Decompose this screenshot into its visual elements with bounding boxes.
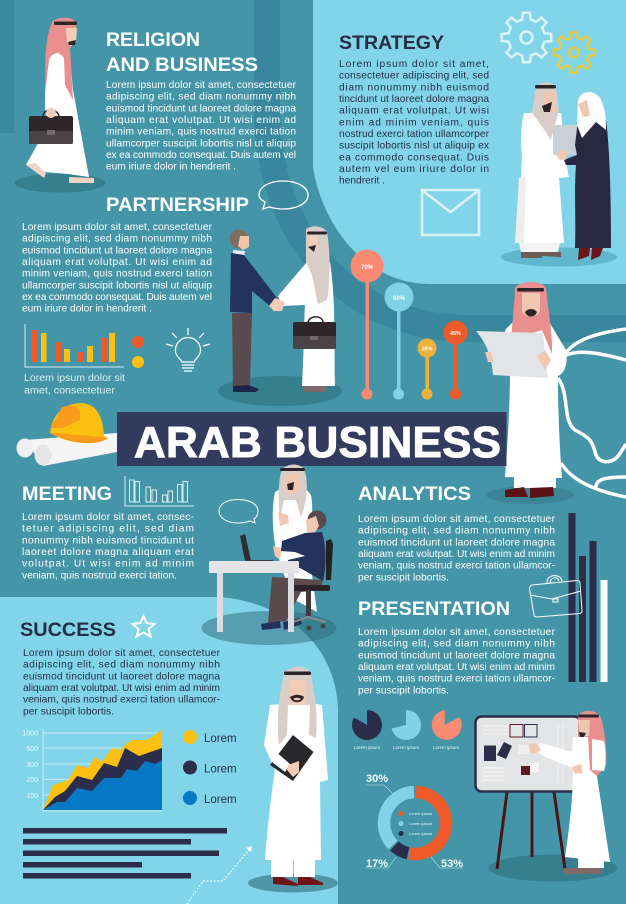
background: dark corner strip <box>0 0 14 133</box>
text placeholder bars <box>23 828 227 878</box>
text block: analytics: veniam, quis nostrud exerci tation ullamcor- <box>358 561 555 572</box>
donut chart: 30% <box>366 773 388 785</box>
text block: strategy: suscipit lobortis nisl ut aliquip ex <box>339 141 489 152</box>
text block: success: Lorem ipsum dolor sit amet, consectetuer <box>23 648 221 659</box>
text block: meeting <box>22 512 194 581</box>
text block: meeting: Lorem ipsum dolor sit amet, consec- <box>22 512 194 523</box>
arrow: dashed growth arrow <box>187 846 252 904</box>
text block: meeting: tetuer adipiscing elit, sed diam <box>22 524 194 535</box>
title banner: ARAB BUSINESS <box>134 418 501 467</box>
pie labels: Lorem ipsum <box>393 745 419 750</box>
legend: area chart: Lorem <box>204 794 237 806</box>
text block: religion and business: ullamcorper suscipit lobortis nisl ut aliquip <box>106 138 296 149</box>
figure: arab man reading a newspaper <box>476 282 574 504</box>
pie chart: salmon <box>432 710 462 740</box>
text block: analytics: per suscipit lobortis. <box>358 572 449 583</box>
figure: arab man and woman reviewing a document <box>501 82 617 266</box>
text block: analytics: aliquam erat volutpat. Ut wisi enim ad minim <box>358 549 555 560</box>
background: dark arc band <box>254 0 626 342</box>
heading: partnership: PARTNERSHIP <box>106 194 249 216</box>
heading: analytics: ANALYTICS <box>358 483 471 505</box>
heading: strategy: STRATEGY <box>339 32 444 54</box>
text block: religion and business: aliquam erat volutpat. Ut wisi enim ad <box>106 115 296 126</box>
legend: area chart: Lorem <box>204 764 237 776</box>
text block: strategy: hendrerit . <box>339 176 385 187</box>
icon: yellow gear <box>554 32 594 73</box>
area chart <box>22 729 162 811</box>
text block: analytics <box>358 514 556 583</box>
heading: presentation: PRESENTATION <box>358 598 510 620</box>
text block: partnership: adipiscing elit, sed diam nonummy nibh <box>22 234 212 245</box>
icon: white gear <box>502 13 551 62</box>
text block: meeting: volutpat. Ut wisi enim ad minim <box>22 559 194 570</box>
text block: meeting: nonummy nibh euismod tincidunt ut <box>22 535 194 546</box>
text block: partnership: Lorem ipsum dolor sit amet, consectetuer <box>22 222 213 233</box>
text block: meeting: veniam, quis nostrud exerci tation. <box>22 570 177 581</box>
icon: outlined bar chart <box>125 476 194 506</box>
decoration: globe outline <box>558 329 626 497</box>
heading: success: SUCCESS <box>20 619 116 641</box>
chart: percentage pins: 45% <box>450 331 461 337</box>
text block: partnership: ullamcorper suscipit lobortis nisl ut aliquip <box>22 280 212 291</box>
text block: partnership: aliquam erat volutpat. Ut wisi enim ad <box>22 257 212 268</box>
heading: religion and business <box>106 29 258 76</box>
pie labels: Lorem ipsum <box>354 745 380 750</box>
background: light blue top panel <box>313 0 626 284</box>
area chart: 1000 <box>22 730 38 738</box>
text block: partnership: eum iriure dolor in hendrerit . <box>22 304 152 315</box>
text block: strategy: Lorem ipsum dolor sit amet, <box>339 59 489 70</box>
background: light blue bottom panel <box>0 597 338 904</box>
icon: speech bubble <box>259 181 308 209</box>
area chart: 100 <box>26 793 38 800</box>
text block: presentation: per suscipit lobortis. <box>358 685 449 696</box>
text block: success: euismod tincidunt ut laoreet dolore magna <box>23 671 220 682</box>
text block: religion and business: ex ea commodo consequat. Duis autem vel <box>106 150 296 161</box>
text block: analytics: euismod tincidunt ut laoreet dolore magna <box>358 537 555 548</box>
figure: walking man with briefcase <box>14 18 106 192</box>
chart: percentage pins <box>350 250 468 400</box>
text block: strategy: tincidunt ut laoreet dolore magna <box>339 94 489 105</box>
donut chart: Lorem ipsum <box>409 831 433 836</box>
heading: religion and business: RELIGION <box>106 29 200 51</box>
text block: success: per suscipit lobortis. <box>23 706 114 717</box>
text block: strategy: ea commodo consequat. Duis <box>339 152 489 163</box>
text block: partnership: euismod tincidunt ut laoreet dolore magna <box>22 245 212 256</box>
text block: strategy: enim ad minim veniam, quis <box>339 117 489 128</box>
text block: religion and business: eum iriure dolor in hendrerit . <box>106 162 236 173</box>
area chart: 200 <box>26 777 38 784</box>
text block: presentation: veniam, quis nostrud exerci tation ullamcor- <box>358 674 555 685</box>
text block: strategy: nostrud exerci tation ullamcorper <box>339 129 490 140</box>
chart caption: Lorem ipsum dolor sit <box>24 373 125 384</box>
donut chart: Lorem ipsum <box>409 811 433 816</box>
text block: religion and business: minim veniam, quis nostrud exerci tation <box>106 127 296 138</box>
figure: arab man holding a folder <box>248 667 338 892</box>
donut chart <box>365 773 463 870</box>
heading: meeting: MEETING <box>22 483 112 505</box>
text block: partnership <box>22 222 213 315</box>
text block: religion and business: euismod tincidunt ut laoreet dolore magna <box>106 103 296 114</box>
pie labels: Lorem ipsum <box>433 745 459 750</box>
icon: briefcase outline <box>530 576 582 617</box>
text block: presentation: Lorem ipsum dolor sit amet, consectetuer <box>358 627 556 638</box>
heading: religion and business: AND BUSINESS <box>106 54 258 76</box>
text block: analytics: Lorem ipsum dolor sit amet, consectetuer <box>358 514 556 525</box>
figure: meeting at desk <box>202 464 336 645</box>
donut chart: 53% <box>441 858 463 870</box>
chart caption: amet, consectetuer <box>24 386 116 396</box>
icon: envelope <box>422 190 479 235</box>
pie labels <box>354 745 459 750</box>
text block: religion and business: Lorem ipsum dolor sit amet, consectetuer <box>106 80 297 91</box>
text block: partnership: ex ea commodo consequat. Duis autem vel <box>22 292 212 303</box>
chart: percentage pins: 60% <box>393 296 406 302</box>
text block: religion and business: adipiscing elit, sed diam nonummy nibh <box>106 92 296 103</box>
text block: meeting: laoreet dolore magna aliquam erat <box>22 547 194 558</box>
chart caption <box>24 373 125 396</box>
donut chart: 17% <box>366 858 388 870</box>
text block: partnership: minim veniam, quis nostrud exerci tation <box>22 269 212 280</box>
icon: meeting speech bubble <box>219 500 258 523</box>
text block: success: aliquam erat volutpat. Ut wisi enim ad minim <box>23 683 220 694</box>
pie chart: navy <box>352 710 382 740</box>
text block: strategy: consectetuer adipiscing elit, sed <box>339 71 489 82</box>
figure: arab man presenting at a board <box>476 711 618 882</box>
text block: analytics: adipiscing elit, sed diam nonummy nibh <box>358 526 555 537</box>
text block: success: adipiscing elit, sed diam nonummy nibh <box>23 660 220 671</box>
icon: star <box>132 616 154 636</box>
text block: presentation <box>358 627 556 696</box>
text block: strategy: aliquam erat volutpat. Ut wisi <box>339 106 489 117</box>
legend: area chart: Lorem <box>204 733 237 745</box>
chart: percentage pins: 70% <box>361 265 374 271</box>
bar chart: partnership <box>25 324 144 368</box>
text block: strategy: autem vel eum iriure dolor in <box>339 164 489 175</box>
legend: area chart <box>183 730 237 806</box>
text block: success <box>23 648 221 717</box>
text block: presentation: euismod tincidunt ut laoreet dolore magna <box>358 650 555 661</box>
text block: presentation: adipiscing elit, sed diam nonummy nibh <box>358 639 555 650</box>
area chart: 300 <box>26 762 38 769</box>
text block: religion and business <box>106 80 297 173</box>
text block: success: veniam, quis nostrud exerci tation ullamcor- <box>23 695 220 706</box>
figure: handshake between businessman and arab man <box>218 226 342 406</box>
icon: hard hat and blueprint rolls <box>16 403 117 466</box>
background: medium arc band <box>280 0 626 315</box>
bar chart: vertical bars <box>568 513 608 682</box>
text block: strategy <box>339 59 490 187</box>
pie chart: light blue <box>392 710 421 740</box>
donut chart: Lorem ipsum <box>409 821 433 826</box>
text block: presentation: aliquam erat volutpat. Ut wisi enim ad minim <box>358 662 555 673</box>
icon: light bulb <box>166 328 210 371</box>
text block: strategy: diam nonummy nibh euismod <box>339 82 489 93</box>
chart: percentage pins: 30% <box>421 346 433 352</box>
area chart: 500 <box>26 746 38 753</box>
